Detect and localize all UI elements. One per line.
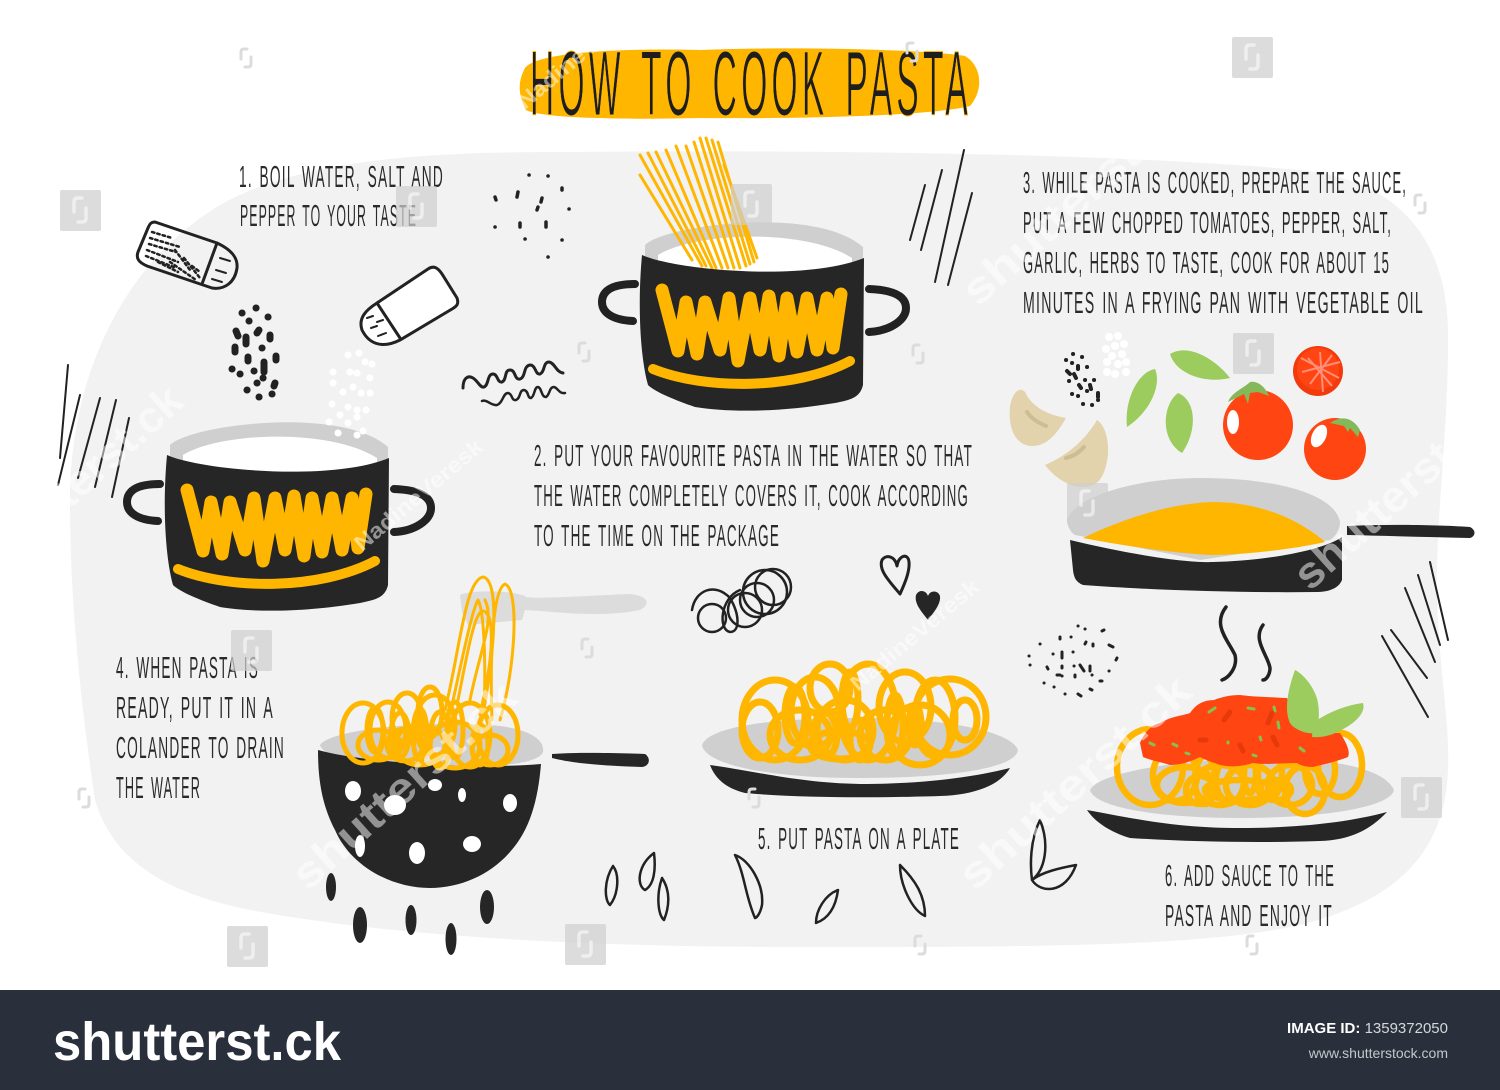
basil leaves	[1127, 350, 1230, 453]
sauce herbs	[1150, 707, 1304, 756]
sauce	[1140, 695, 1349, 767]
salt falling	[329, 353, 372, 435]
pepper shaker icon	[137, 222, 237, 288]
step 2 text: TO THE TIME ON THE PACKAGE	[534, 518, 780, 553]
salt shaker icon	[361, 267, 458, 345]
faint watermark marks	[79, 43, 1425, 954]
dots doodle	[1029, 626, 1117, 696]
pepper dots doodle	[495, 175, 569, 257]
watermark text: shutterst.ck	[282, 672, 527, 899]
step 3 text	[1023, 165, 1424, 320]
speed lines left	[58, 365, 129, 497]
colander	[318, 577, 649, 955]
title highlight	[520, 48, 979, 119]
footer logo: shutterst.ck	[53, 1012, 342, 1072]
watermark text: shutterst.ck	[1284, 389, 1500, 599]
text: 5. PUT PASTA ON A PLATE	[758, 821, 960, 856]
steam	[1220, 607, 1270, 680]
squiggles doodle	[463, 362, 565, 405]
pot step 1	[127, 422, 431, 611]
footer bar	[0, 990, 1500, 1090]
step 4 text: THE WATER	[116, 770, 201, 805]
tomato large	[1223, 390, 1293, 460]
spices for sauce	[1066, 336, 1126, 405]
step 1 text	[239, 159, 444, 233]
website: www.shutterstock.com	[1308, 1045, 1448, 1061]
step 4 text	[116, 650, 285, 805]
image id: IMAGE ID: 1359372050	[1287, 1020, 1448, 1037]
pasta nest	[342, 687, 518, 768]
tomato small	[1304, 418, 1366, 480]
step 6 text	[1165, 858, 1335, 933]
colander handle	[552, 753, 649, 767]
watermark squares	[60, 37, 1442, 967]
pan handle	[1347, 525, 1474, 538]
plate step 6	[1087, 670, 1394, 842]
plate step 5	[702, 664, 1018, 797]
colander holes	[345, 779, 517, 864]
text: READY, PUT IT IN A	[116, 690, 274, 725]
title	[520, 33, 979, 135]
step 2 text	[534, 438, 973, 553]
tomato slice	[1293, 346, 1343, 396]
frying pan	[1067, 478, 1474, 592]
background panel	[70, 151, 1448, 947]
white salt	[1106, 336, 1126, 374]
leaf doodles	[606, 820, 1076, 923]
black pepper	[1066, 354, 1098, 405]
garlic cloves	[1010, 390, 1108, 487]
text: 1. BOIL WATER, SALT AND	[239, 159, 444, 194]
pasta strands	[640, 138, 757, 268]
speed lines right	[1382, 562, 1448, 717]
sauce tomato bits	[1200, 712, 1277, 751]
basil	[1287, 670, 1319, 733]
pot step 2	[602, 138, 906, 411]
pasta nest	[742, 664, 986, 765]
watermark text: shutterst.ck	[949, 665, 1201, 899]
watermark text: NadineVeresk	[349, 433, 488, 556]
water drops	[326, 873, 494, 955]
tomatoes	[1223, 346, 1366, 480]
watermark text: NadineVeresk	[512, 0, 651, 114]
fork	[460, 591, 647, 625]
watermark text: shutterst.ck	[952, 81, 1204, 315]
heart filled	[916, 591, 940, 620]
heart outline	[881, 556, 909, 594]
scribble circles doodle	[692, 569, 791, 632]
pasta	[1117, 729, 1362, 814]
speed lines	[910, 150, 972, 285]
pepper falling	[232, 308, 276, 397]
pasta strands	[445, 577, 514, 720]
text: PEPPER TO YOUR TASTE	[240, 198, 417, 233]
text: COLANDER TO DRAIN	[116, 730, 285, 765]
step 4 text: 4. WHEN PASTA IS	[116, 650, 259, 685]
watermark text: NadineVeresk	[845, 573, 984, 696]
